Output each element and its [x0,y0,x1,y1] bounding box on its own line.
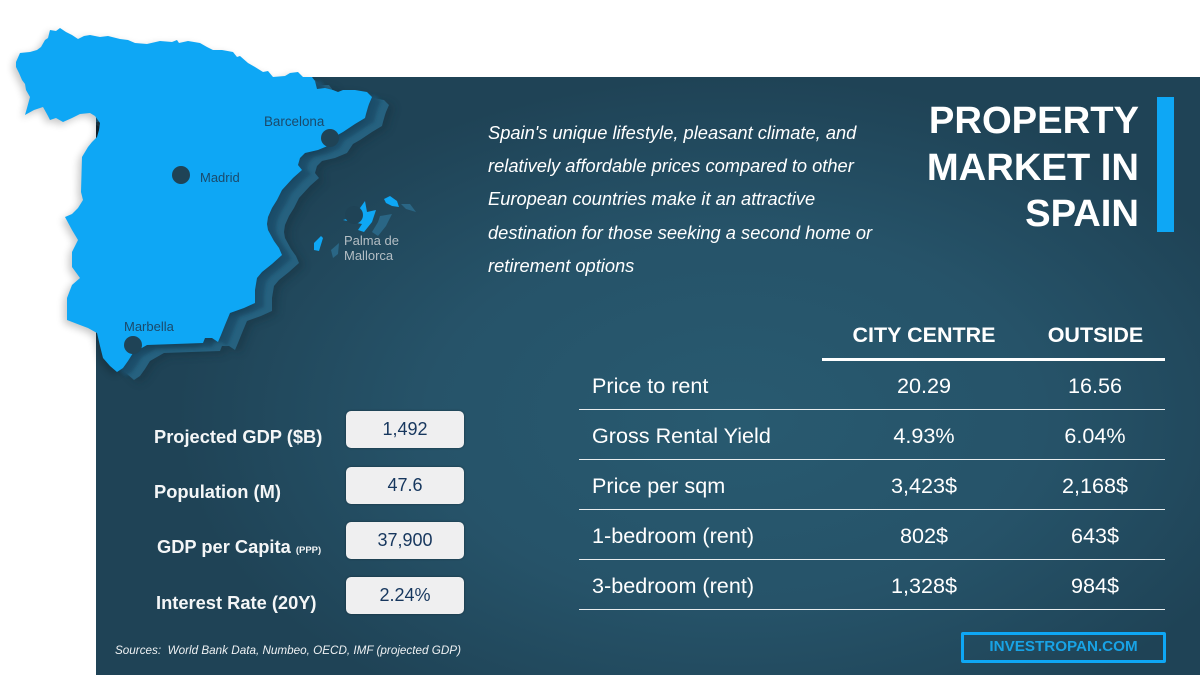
row: 3-bedroom rent [579,560,1165,610]
row: 1-bedroom rent: 802$ [900,523,948,548]
row: gross rental yield: 6.04% [1064,423,1126,448]
row: 1-bedroom rent: 1-bedroom (rent) [592,523,754,548]
table header rule [822,358,1165,361]
value: population: 47.6 [387,475,423,495]
title: MARKET IN [927,146,1139,188]
value: projected GDP: 1,492 [382,419,428,439]
row: gross rental yield: Gross Rental Yield [592,423,771,448]
intro paragraph: European countries make it an attractive [488,188,815,209]
row: price per sqm: Price per sqm [592,473,725,498]
row: 3-bedroom rent: 3-bedroom (rent) [592,573,754,598]
value: GDP per capita [346,522,464,559]
intro paragraph [488,122,873,276]
label: GDP per capita: GDP per Capita (PPP) [157,536,321,557]
soft shadow of the map [96,80,390,380]
row: gross rental yield [579,410,1165,460]
intro paragraph: relatively affordable prices compared to other [488,155,854,176]
value: interest rate [346,577,464,614]
website badge [961,632,1166,663]
mainland shape [16,28,372,372]
label: projected GDP: Projected GDP ($B) [154,426,322,447]
title: PROPERTY [929,99,1139,142]
title: SPAIN [1025,192,1139,235]
sources note: Sources: World Bank Data, Numbeo, OECD, IMF (projected GDP) [115,644,461,657]
label: interest rate: Interest Rate (20Y) [156,592,317,613]
title [927,99,1139,235]
value: projected GDP [346,411,464,448]
label: Barcelona: Barcelona [264,114,325,129]
row: price to rent [579,360,1165,410]
table header: city centre: CITY CENTRE [853,323,995,347]
row: 3-bedroom rent: 1,328$ [891,573,957,598]
city marker: Madrid [172,166,190,184]
Balearic islands [314,196,416,258]
label: Marbella: Marbella [124,319,175,334]
city marker: Palma de Mallorca [345,206,363,224]
value: population [346,467,464,504]
row: gross rental yield: 4.93% [893,423,955,448]
title accent bar [1157,97,1174,232]
table header: outside: OUTSIDE [1048,323,1143,347]
value: interest rate: 2.24% [379,585,431,605]
row: price per sqm [579,460,1165,510]
row: 1-bedroom rent [579,510,1165,560]
intro paragraph: retirement options [488,255,634,276]
intro paragraph: Spain's unique lifestyle, pleasant climate, and [488,122,856,143]
label: Palma de Mallorca: Mallorca [344,248,394,263]
row: price per sqm: 3,423$ [891,473,957,498]
label: population: Population (M) [154,481,281,502]
website badge: INVESTROPAN.COM [989,638,1138,655]
notch by the Portuguese border [96,125,100,139]
city marker: Marbella [124,336,142,354]
row: price to rent: Price to rent [592,373,708,398]
row: price to rent: 20.29 [897,373,951,398]
value: GDP per capita: 37,900 [377,530,433,550]
label: Palma de Mallorca: Palma de [344,233,399,248]
map of Spain [10,28,416,380]
city marker: Barcelona [321,129,339,147]
row: 3-bedroom rent: 984$ [1071,573,1119,598]
row: price per sqm: 2,168$ [1062,473,1128,498]
intro paragraph: destination for those seeking a second home or [488,222,872,243]
row: 1-bedroom rent: 643$ [1071,523,1119,548]
label: Madrid: Madrid [200,170,240,185]
row: price to rent: 16.56 [1068,373,1122,398]
